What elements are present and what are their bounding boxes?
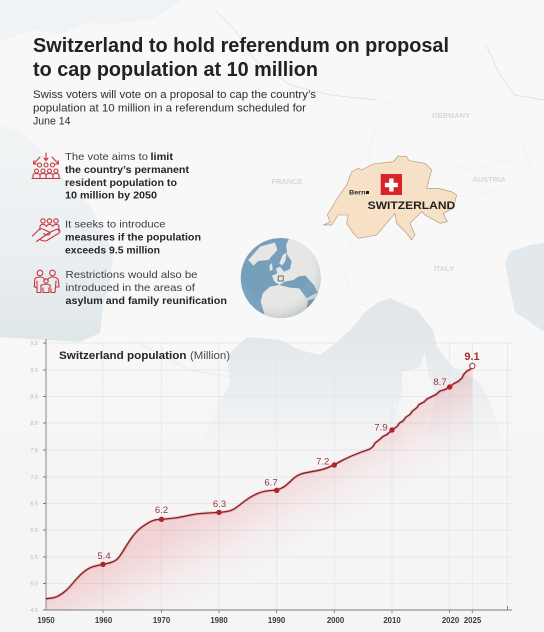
data points bbox=[100, 363, 475, 567]
sea: channel bbox=[0, 0, 182, 42]
title: to cap population at 10 million bbox=[33, 59, 318, 81]
text: measures bbox=[65, 219, 201, 256]
map labels: GERMANY bbox=[432, 111, 470, 120]
chart title: Switzerland population bbox=[59, 350, 187, 362]
y axis labels: 7.5 bbox=[30, 448, 38, 454]
x axis labels: 2025 bbox=[464, 616, 482, 625]
value labels: 7.2 bbox=[316, 456, 329, 468]
country name: SWITZERLAND bbox=[368, 200, 455, 212]
y axis labels: 9.5 bbox=[30, 341, 38, 347]
island: corsica and sardinia bbox=[397, 352, 436, 470]
value labels: 6.2 bbox=[155, 505, 168, 516]
map labels: FRANCE bbox=[271, 177, 303, 186]
country borders bbox=[135, 10, 544, 377]
map labels: AUSTRIA bbox=[472, 175, 506, 184]
x axis labels: 1950 bbox=[37, 616, 55, 625]
x axis labels bbox=[37, 616, 482, 625]
area under the line bbox=[46, 366, 472, 610]
map labels: ITALY bbox=[434, 264, 454, 273]
text: vote aims: The vote aims to bbox=[65, 151, 148, 163]
x axis labels: 1990 bbox=[268, 616, 286, 625]
axes bbox=[43, 339, 512, 613]
text: restrictions: Restrictions would also be bbox=[66, 269, 198, 281]
x axis labels: 1970 bbox=[153, 616, 171, 625]
gridlines bbox=[46, 343, 512, 610]
value labels: 6.7 bbox=[264, 478, 278, 488]
country shape bbox=[323, 156, 457, 240]
icon: hand with people bbox=[32, 219, 60, 242]
y axis labels: 5.0 bbox=[30, 582, 38, 588]
Bern label: Bern bbox=[349, 190, 366, 197]
x axis labels: 2010 bbox=[383, 616, 401, 625]
land: europe and asia bbox=[272, 237, 323, 292]
value labels: 5.4 bbox=[97, 551, 111, 562]
subtitle: population at 10 million in a referendum scheduled for bbox=[33, 102, 306, 114]
icon: family bbox=[34, 270, 59, 292]
title bbox=[33, 35, 449, 81]
y axis labels: 8.5 bbox=[30, 394, 38, 400]
x axis labels: 2000 bbox=[327, 616, 345, 625]
text: restrictions: asylum and family reunification bbox=[66, 295, 227, 307]
sea: adriatic bbox=[505, 243, 544, 332]
subtitle: June 14 bbox=[33, 116, 70, 128]
text: restrictions bbox=[66, 269, 227, 307]
icon: people limit bbox=[32, 153, 60, 178]
y axis labels: 4.5 bbox=[30, 608, 38, 614]
value labels: 6.3 bbox=[213, 499, 226, 510]
line halo bbox=[46, 366, 472, 599]
subtitle: Swiss voters will vote on a proposal to cap the country’s bbox=[33, 89, 317, 101]
value labels bbox=[97, 351, 480, 562]
x axis labels: 2020 bbox=[442, 616, 460, 625]
y axis labels: 9.0 bbox=[30, 368, 38, 374]
population line bbox=[46, 366, 472, 599]
line chart: Switzerland population bbox=[30, 339, 512, 625]
y axis labels: 8.0 bbox=[30, 421, 38, 427]
y axis labels: 7.0 bbox=[30, 475, 38, 481]
text: vote aims bbox=[65, 151, 190, 202]
text: vote aims: limit bbox=[150, 151, 174, 163]
text: measures: measures if the population bbox=[65, 232, 201, 244]
locator globe bbox=[241, 237, 323, 322]
land: greenland bbox=[248, 242, 277, 266]
map: Switzerland bbox=[323, 156, 457, 240]
text: vote aims: resident population to bbox=[65, 177, 177, 189]
map labels bbox=[271, 111, 506, 273]
y axis labels: 5.5 bbox=[30, 555, 38, 561]
value labels: 7.9 bbox=[374, 422, 388, 434]
land: africa and arabia bbox=[261, 285, 317, 322]
text: measures: exceeds 9.5 million bbox=[65, 244, 160, 256]
y axis labels bbox=[30, 341, 38, 614]
y axis labels: 6.5 bbox=[30, 502, 38, 508]
land: british isles bbox=[269, 263, 273, 271]
land: scandinavia bbox=[279, 252, 287, 266]
value labels: 9.1 bbox=[464, 351, 480, 363]
x axis labels: 1960 bbox=[95, 616, 113, 625]
chart title: (Million) bbox=[190, 350, 230, 362]
sea: atlantic bbox=[0, 122, 113, 342]
x axis labels: 1980 bbox=[210, 616, 228, 625]
text: vote aims: the country’s permanent bbox=[65, 164, 190, 176]
text: vote aims: 10 million by 2050 bbox=[65, 190, 157, 202]
title: Switzerland to hold referendum on proposal bbox=[33, 35, 449, 57]
subtitle bbox=[33, 89, 317, 128]
value labels: 8.7 bbox=[433, 377, 447, 388]
marker bbox=[278, 276, 283, 281]
text: restrictions: introduced in the areas of bbox=[66, 282, 195, 294]
flag bbox=[381, 174, 402, 195]
text: measures: It seeks to introduce bbox=[65, 219, 166, 231]
y axis labels: 6.0 bbox=[30, 528, 38, 534]
sea: mediterranean bbox=[180, 298, 502, 490]
chart backdrop fade bbox=[0, 335, 544, 632]
